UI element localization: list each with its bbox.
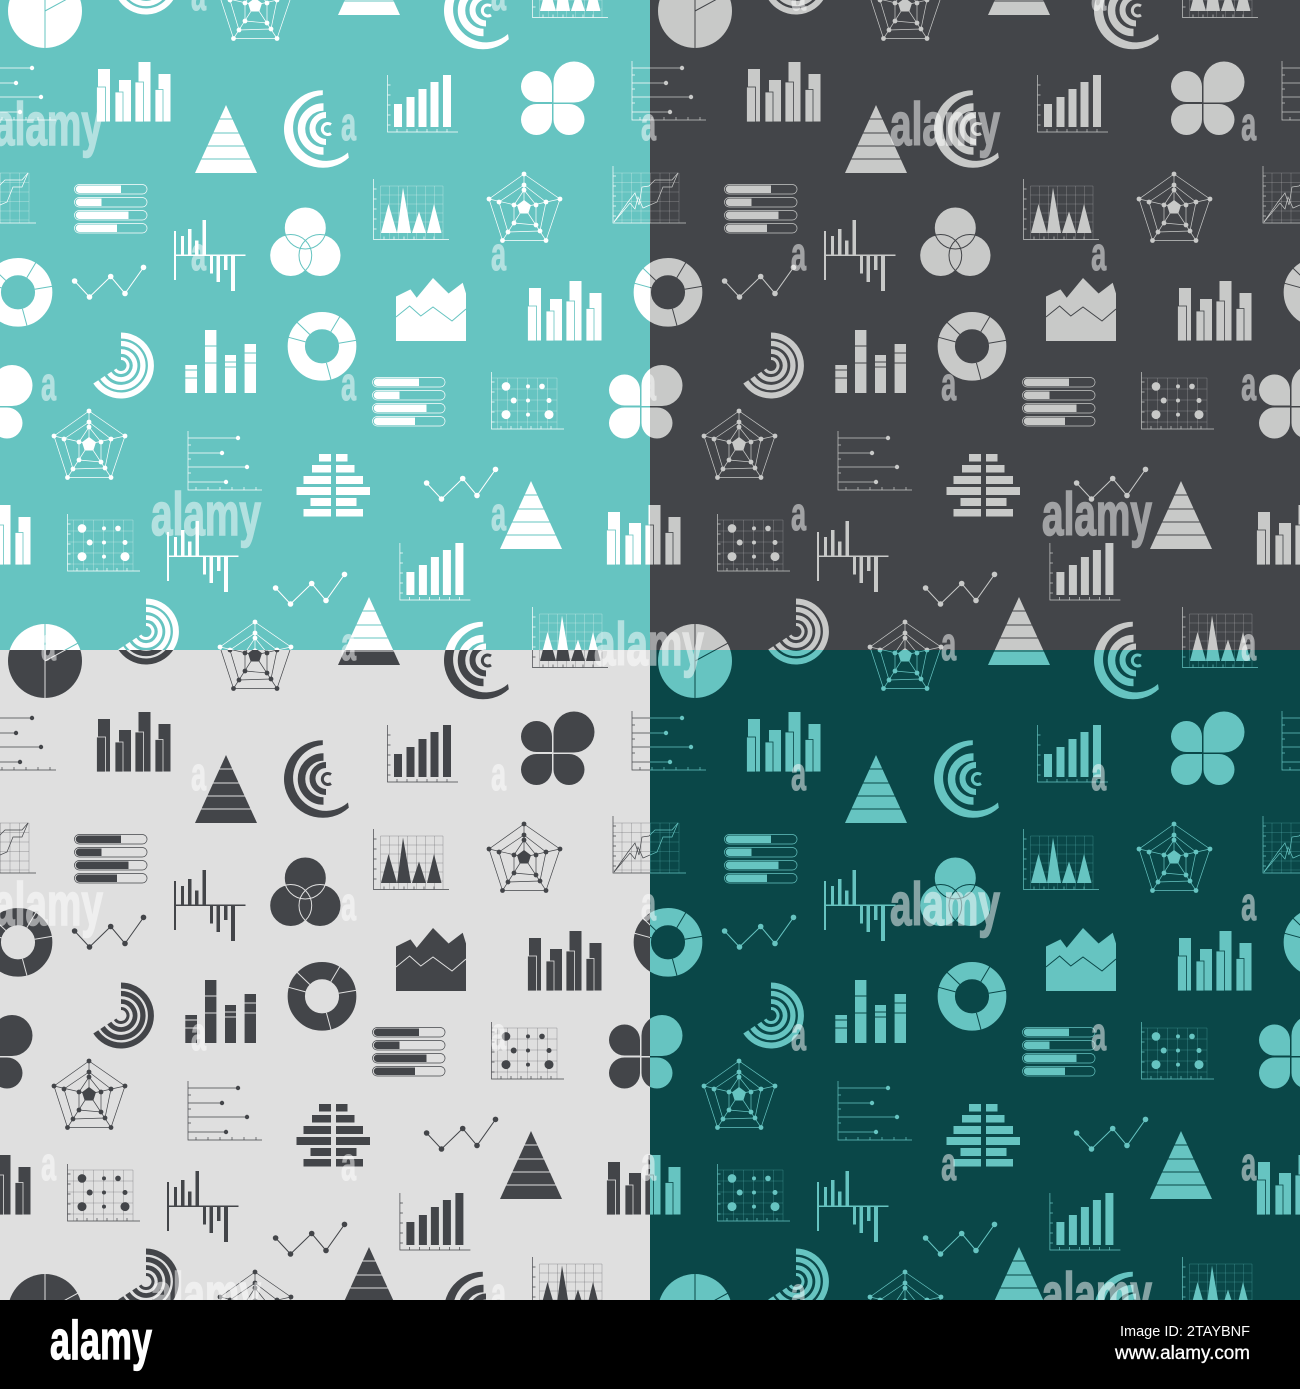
watermark overlay: alamy — [151, 1261, 261, 1328]
watermark overlay: aaaaa — [41, 1138, 1257, 1191]
watermark overlay: aa — [491, 488, 807, 541]
icon: clovers — [0, 62, 682, 438]
icon: stacked bars — [185, 330, 256, 393]
watermark overlay: alamy — [151, 481, 261, 548]
watermark overlay: aaaa — [191, 1008, 1107, 1061]
watermark overlay: alamy — [1042, 481, 1152, 548]
footer logo: alamy — [50, 1309, 152, 1371]
icon: diverging bars — [167, 220, 246, 592]
icon: progress bars — [74, 184, 445, 426]
icon: triangle charts — [374, 0, 608, 668]
watermark overlay: alamy — [890, 871, 1000, 938]
icon: pyramids — [190, 0, 567, 665]
icon: overlapping bars — [0, 62, 680, 565]
watermark overlay: aaaaa — [41, 358, 1257, 411]
icon: radar charts — [52, 0, 562, 691]
watermark overlay: alamy — [890, 91, 1000, 158]
watermark overlay: aaaa — [41, 618, 1257, 671]
panel: teal pattern tile — [0, 0, 650, 650]
watermark overlay: aaa — [341, 98, 1257, 151]
icon set: chart pattern — [0, 0, 706, 699]
icon: stepped bars — [296, 454, 370, 516]
website: www.alamy.com — [1114, 1343, 1250, 1364]
watermark overlay: aa — [491, 1268, 807, 1321]
watermark overlay: aaa — [341, 878, 1257, 931]
footer bar — [0, 1300, 1300, 1389]
panel: charcoal pattern tile — [650, 0, 1300, 650]
panel: light grey pattern tile — [0, 650, 650, 1300]
watermark overlay: alamy — [1042, 1261, 1152, 1328]
icon: axis bar charts — [388, 75, 470, 600]
watermark overlay: aaaa — [191, 748, 1107, 801]
image id: Image ID: 2TAYBNF — [1120, 1323, 1250, 1340]
watermark overlay: aaaa — [191, 228, 1107, 281]
icon: lollipop charts — [0, 61, 706, 490]
icon: spiral arcs — [96, 0, 176, 661]
icon: pie chart — [8, 0, 82, 698]
icon: venn circles — [270, 207, 341, 276]
watermark overlay: alamy — [594, 611, 704, 678]
icon: donuts — [0, 262, 702, 380]
icon: line grid chart — [0, 166, 686, 223]
icon: line graphs — [72, 265, 498, 607]
icon: area chart — [396, 278, 466, 341]
icon: bubble grids — [68, 372, 564, 571]
icon: concentric arcs — [284, 0, 509, 699]
panel: dark green pattern tile — [650, 650, 1300, 1300]
